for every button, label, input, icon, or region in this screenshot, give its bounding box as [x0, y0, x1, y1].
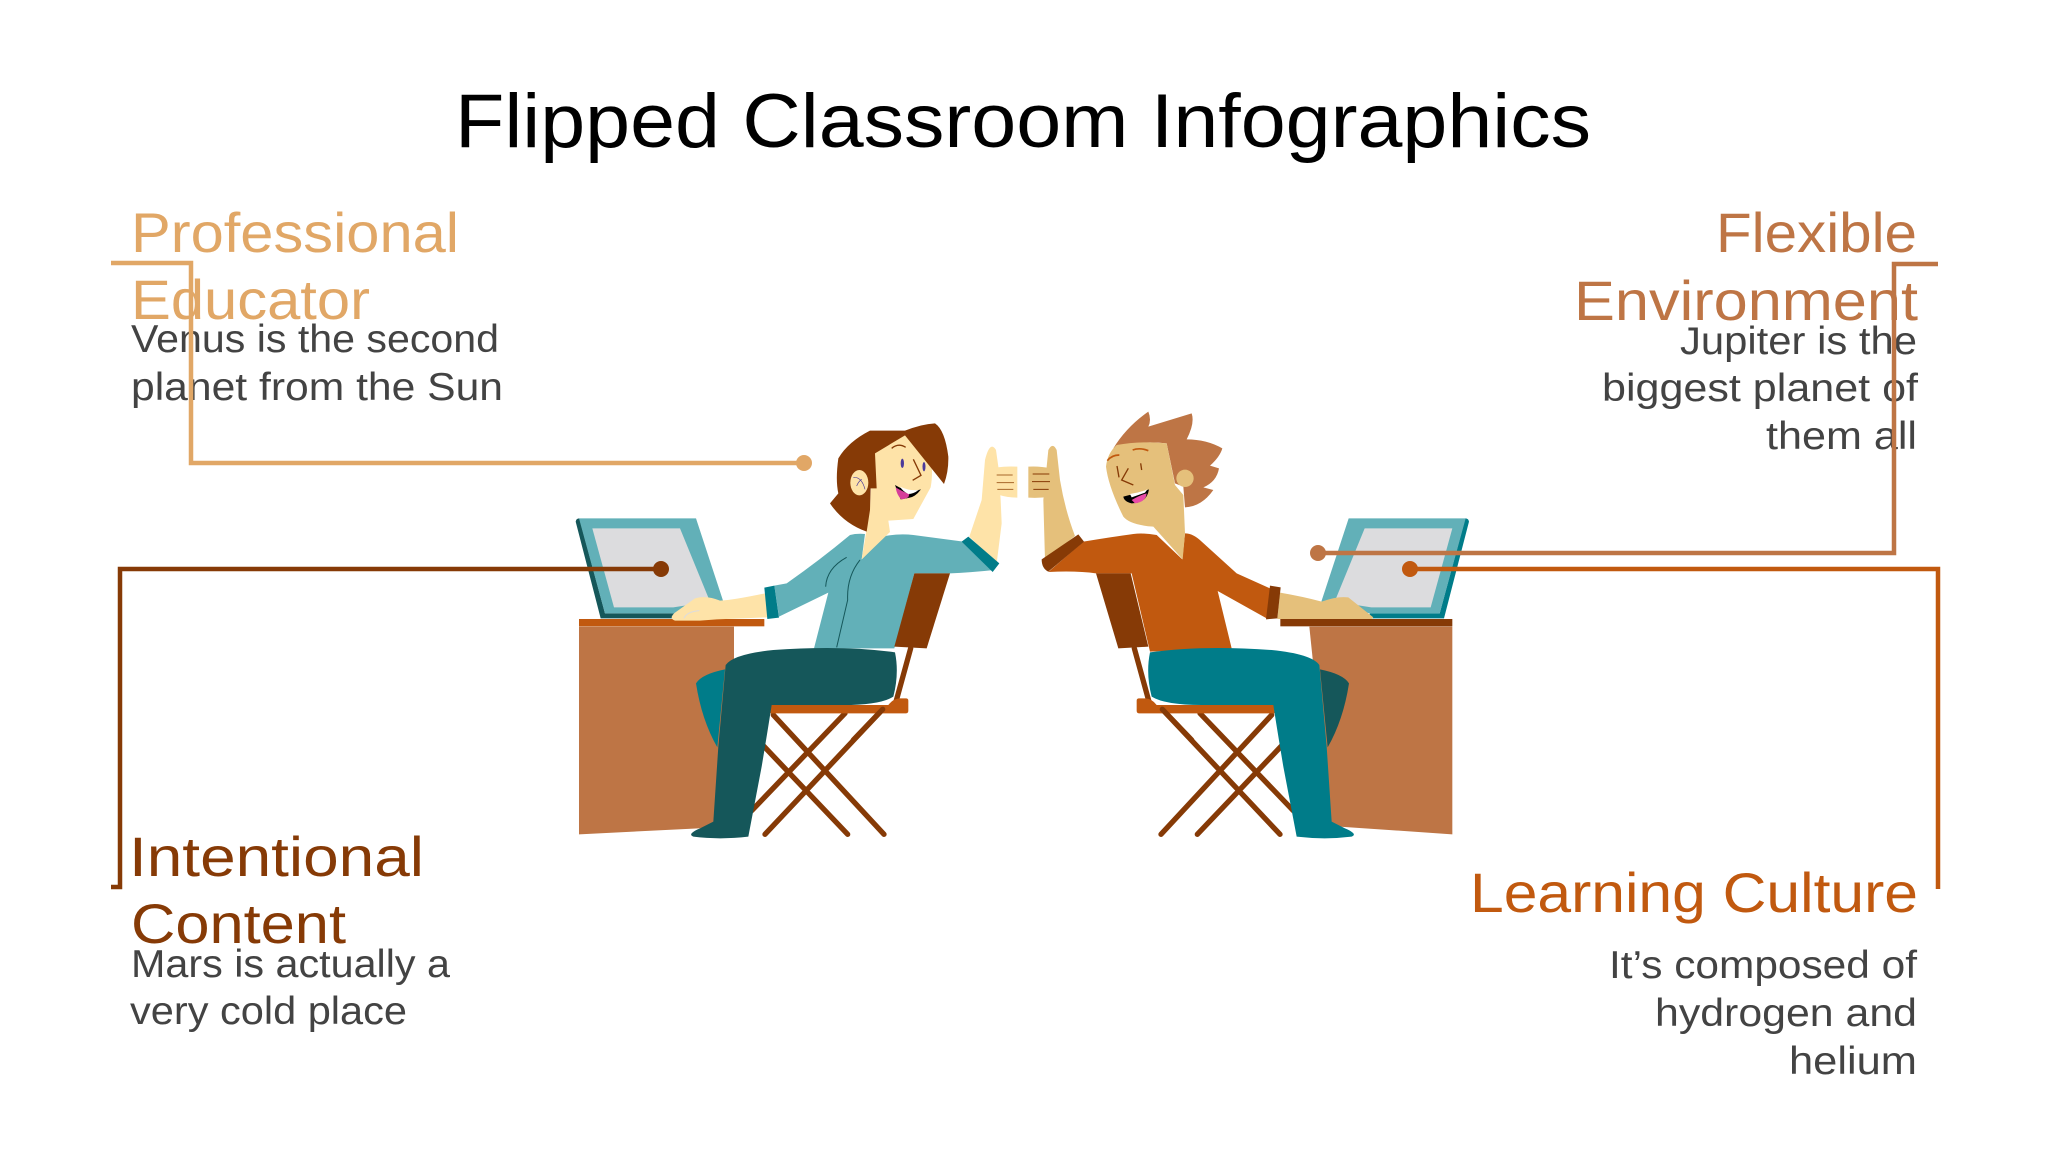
cuff right — [962, 537, 999, 572]
shirt — [774, 534, 994, 648]
cuff right — [1042, 534, 1084, 572]
description: Mars: Mars is actually a — [131, 943, 450, 986]
far leg — [696, 669, 725, 747]
ear — [850, 470, 868, 495]
laptop — [1321, 518, 1469, 618]
description: hydrogen — [1609, 944, 1917, 1083]
heading: Intentional Content — [129, 825, 424, 955]
illustration: man at desk — [1028, 412, 1469, 838]
description: Venus: planet from the Sun — [131, 366, 503, 409]
cuff left — [1266, 586, 1281, 619]
ear — [1176, 470, 1194, 487]
description: Jupiter: biggest planet of — [1602, 367, 1918, 410]
description: Venus: Venus is the second — [131, 318, 499, 361]
shirt details — [826, 557, 860, 647]
cuff left — [764, 586, 779, 619]
illustration: woman at desk — [576, 423, 1017, 838]
pants — [1148, 648, 1354, 838]
heading: Intentional Content: Intentional — [129, 825, 424, 888]
connector: Flexible Environment — [1310, 264, 1938, 561]
raised arm and thumb — [1043, 446, 1075, 560]
heading: Professional Educator: Professional — [131, 201, 459, 264]
mouth — [895, 485, 921, 499]
description: Mars: very cold place — [130, 990, 407, 1033]
heading: Flexible Environment: Flexible — [1716, 201, 1917, 264]
heading: Professional Educator: Educator — [131, 268, 370, 331]
connector: Professional Educator — [111, 263, 812, 471]
connector: Learning Culture — [1402, 561, 1938, 889]
chair back — [1096, 573, 1148, 648]
heading: Intentional Content: Content — [131, 892, 346, 955]
chair legs and seat — [752, 648, 911, 834]
text block: Flexible Environment — [1574, 201, 1918, 458]
text block: Learning Culture — [1470, 861, 1918, 1083]
raised arm and thumb — [969, 447, 1002, 563]
eyes, nose, brows — [1107, 449, 1148, 485]
far leg — [1320, 669, 1349, 747]
hand highlight — [684, 611, 699, 618]
connector: Intentional Content — [111, 561, 669, 887]
text block: Intentional Content — [129, 825, 450, 1033]
neck and face — [1106, 442, 1185, 559]
description: Jupiter: them all — [1766, 415, 1917, 458]
heading: Professional Educator — [131, 201, 459, 331]
fist — [997, 466, 1017, 498]
description: Jupiter — [1602, 320, 1918, 458]
hair — [1113, 412, 1222, 507]
mouth — [1123, 489, 1149, 503]
lower arm and hand — [1277, 593, 1373, 619]
shirt — [1048, 533, 1270, 652]
hair — [830, 423, 948, 532]
description: hydrogen: hydrogen and — [1655, 992, 1917, 1035]
heading: Learning Culture: Learning Culture — [1470, 861, 1918, 924]
heading: Flexible Environment — [1574, 201, 1918, 332]
heading: Flexible Environment: Environment — [1574, 269, 1918, 332]
neck and face — [862, 433, 932, 559]
description: hydrogen: helium — [1789, 1040, 1917, 1083]
eyes, nose, brow — [892, 445, 925, 480]
description: Mars — [130, 943, 450, 1033]
description: Venus — [131, 318, 503, 409]
text block: Professional Educator — [131, 201, 503, 409]
desk — [1280, 619, 1452, 834]
chair back — [894, 573, 950, 648]
chair legs and seat — [1134, 648, 1293, 834]
laptop — [576, 518, 723, 618]
title: Flipped Classroom Infographics — [455, 79, 1591, 164]
description: hydrogen: It’s composed of — [1609, 944, 1917, 987]
desk — [579, 619, 764, 834]
lower arm and hand — [672, 593, 767, 621]
fist — [1028, 467, 1050, 498]
description: Jupiter: Jupiter is the — [1680, 320, 1917, 363]
pants — [691, 648, 897, 838]
